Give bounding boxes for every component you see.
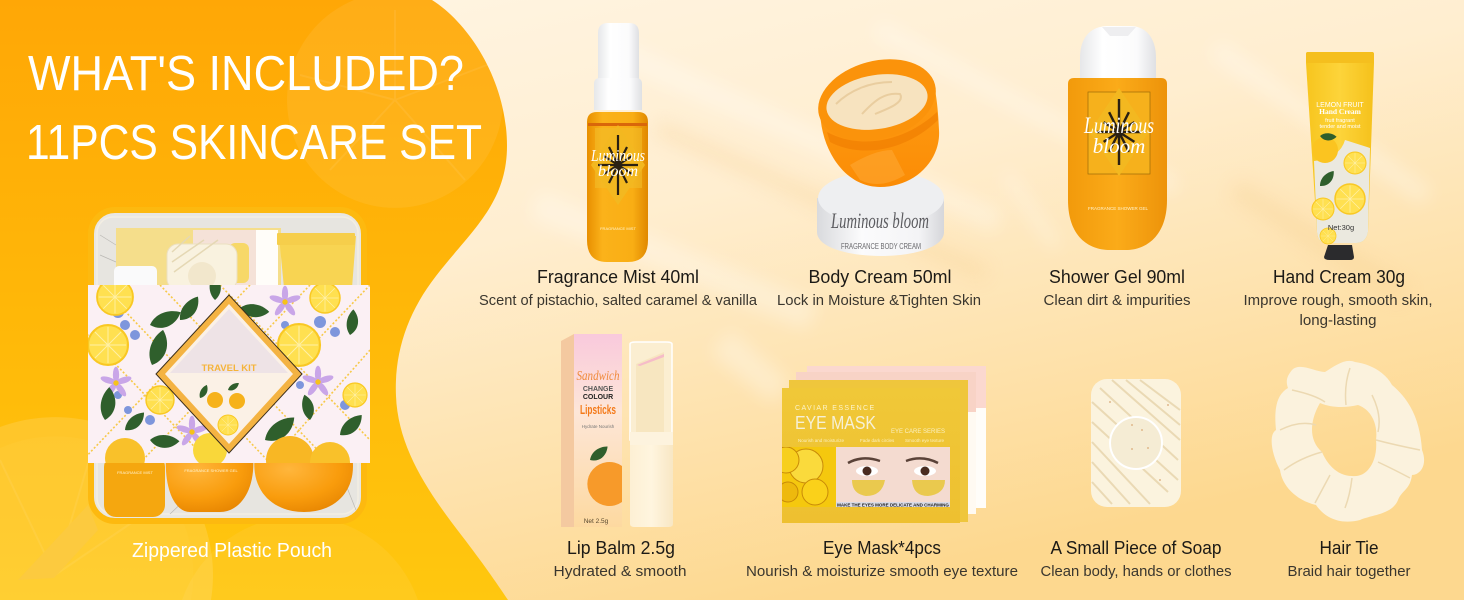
product: shower gel: bloom: [1093, 134, 1145, 158]
pouch contents bottom: bottles: [104, 455, 353, 517]
label: fragrance mist: [479, 267, 758, 309]
front pack: Nourish and moisturize: [798, 438, 845, 443]
back packs: [789, 366, 986, 522]
diamond label: travel kit: [156, 295, 302, 453]
product: fragrance mist: FRAGRANCE MIST: [600, 226, 636, 231]
product: shower gel: [1068, 26, 1167, 250]
label: lip balm: Hydrated & smooth: [554, 563, 686, 580]
title: 11PCS SKINCARE SET: [26, 116, 482, 170]
label: soap: A Small Piece of Soap: [1050, 538, 1222, 558]
pouch contents bottom: bottles: FRAGRANCE SHOWER GEL: [184, 468, 238, 473]
zipper pull: [18, 505, 98, 580]
gel body: [1068, 78, 1167, 250]
lip balm box: Lipsticks: [580, 402, 616, 417]
lip balm box: Hydrate Nourish: [582, 424, 615, 429]
label: fragrance mist: Fragrance Mist 40ml: [537, 267, 699, 287]
product: hand cream tube: tender and moist: [1320, 124, 1361, 130]
caption: zippered plastic pouch: Zippered Plastic Pouch: [132, 540, 332, 562]
label: body cream: Lock in Moisture &Tighten Skin: [777, 292, 981, 309]
front pack: CAVIAR ESSENCE: [795, 405, 876, 412]
label: hair tie: Braid hair together: [1288, 563, 1411, 580]
diamond label: travel kit: TRAVEL KIT: [201, 363, 257, 374]
lip balm stick: [630, 342, 673, 527]
label: soap: Clean body, hands or clothes: [1040, 563, 1232, 580]
wrap band with lemon pattern: [88, 285, 370, 463]
mist bottle body: [587, 112, 648, 262]
label: eye mask: Eye Mask*4pcs: [823, 538, 941, 558]
product: hand cream tube: fruit fragrant: [1325, 118, 1355, 124]
label: eye mask: [746, 538, 1018, 580]
label: body cream: Body Cream 50ml: [808, 267, 952, 287]
product: body cream jar: [809, 47, 945, 256]
jar bowl: [820, 78, 939, 187]
product: hair tie scrunchie: [1272, 361, 1424, 522]
mist cap: [594, 23, 642, 110]
label: hand cream: Hand Cream 30g: [1273, 267, 1405, 287]
product: fragrance mist: bloom: [598, 163, 638, 180]
front pack: Smooth eye texture: [905, 438, 945, 443]
gel cap: [1080, 26, 1156, 78]
pouch contents bottom: bottles: FRAGRANCE MIST: [117, 470, 153, 475]
label: lip balm: [554, 538, 686, 580]
product: hand cream tube: Hand Cream: [1319, 107, 1362, 116]
panel: orange wave with lemon slices: [0, 0, 508, 600]
title: [26, 47, 482, 170]
jar rim: [809, 47, 945, 153]
product: lip balm box and stick: [561, 334, 673, 527]
product: fragrance mist: [587, 23, 648, 262]
jar base: [817, 171, 944, 256]
lip balm box: Sandwich: [576, 369, 620, 384]
label: body cream: [777, 267, 981, 309]
lip balm box: [561, 334, 622, 527]
jar base: FRAGRANCE BODY CREAM: [841, 241, 921, 251]
front pack: EYE MASK: [795, 413, 876, 433]
front pack: [773, 388, 960, 523]
label: lip balm: Lip Balm 2.5g: [567, 538, 675, 558]
pouch contents top: mask, soap, tube: [114, 228, 356, 290]
front pack: Fade dark circles: [860, 438, 895, 443]
product: hand cream tube: [1306, 52, 1374, 260]
product: hand cream tube: LEMON FRUIT: [1316, 102, 1364, 109]
label: eye mask: Nourish & moisturize smooth eye texture: [746, 563, 1018, 580]
zippered plastic pouch with travel kit: [18, 210, 370, 580]
product: fragrance mist: Luminous: [590, 146, 645, 165]
pouch frame: [91, 210, 364, 521]
jar base: Luminous bloom: [830, 208, 929, 233]
lip balm box: COLOUR: [583, 394, 613, 401]
jar cream: [822, 67, 932, 137]
product: eye mask packs: [773, 366, 986, 523]
label: hand cream: long-lasting: [1300, 312, 1376, 329]
label: hand cream: [1244, 267, 1432, 329]
label: shower gel: Shower Gel 90ml: [1049, 267, 1185, 287]
lip balm box: Net 2.5g: [584, 518, 609, 525]
front pack: EYE CARE SERIES: [891, 429, 945, 435]
product: shower gel: FRAGRANCE SHOWER GEL: [1088, 206, 1148, 211]
product: soap: [1091, 379, 1181, 507]
label: shower gel: [1044, 267, 1190, 309]
label: hair tie: Hair Tie: [1320, 538, 1378, 558]
lip balm box: CHANGE: [583, 386, 613, 393]
label: soap: [1040, 538, 1232, 580]
product: hand cream tube: Net:30g: [1328, 223, 1354, 232]
product: shower gel: Luminous: [1083, 113, 1154, 138]
title: WHAT'S INCLUDED?: [28, 47, 464, 101]
label: hand cream: Improve rough, smooth skin,: [1244, 292, 1432, 309]
front pack: MAKE THE EYES MORE DELICATE AND CHARMING: [837, 502, 949, 508]
label: shower gel: Clean dirt & impurities: [1044, 292, 1190, 309]
label: fragrance mist: Scent of pistachio, salted caramel & vanilla: [479, 292, 758, 309]
label: hair tie: [1288, 538, 1411, 580]
